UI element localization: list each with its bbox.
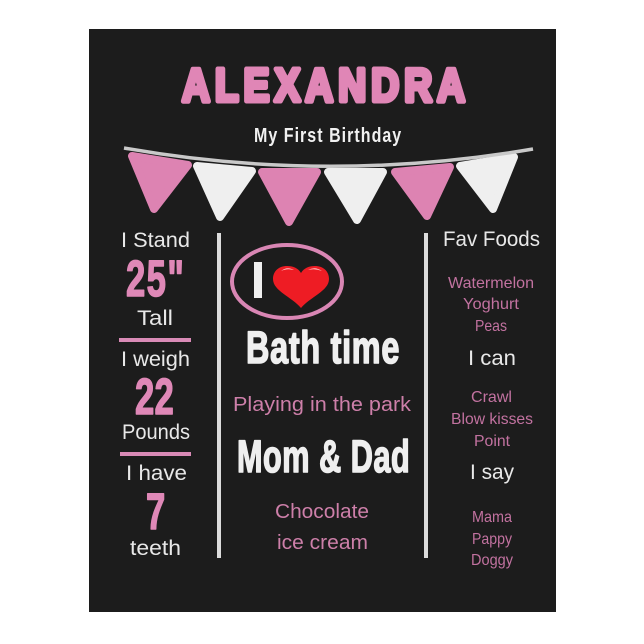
column: centre favourites bbox=[232, 245, 412, 554]
oval badge bbox=[232, 245, 342, 318]
list: words: Doggy bbox=[471, 552, 513, 569]
flag 1 bbox=[132, 156, 188, 209]
divider 1 bbox=[119, 338, 191, 342]
divider 2 bbox=[120, 452, 191, 456]
bunting string bbox=[124, 148, 533, 166]
list: foods: Peas bbox=[475, 318, 507, 335]
panel: black canvas board bbox=[89, 29, 556, 612]
text: Chocolate: Chocolate bbox=[275, 501, 369, 523]
list: skills: Blow kisses bbox=[451, 411, 533, 428]
title: name: ALEXANDRA bbox=[182, 60, 465, 111]
flag 6 bbox=[460, 157, 514, 209]
heading: I say: I say bbox=[470, 461, 514, 484]
text: ice cream: ice cream bbox=[277, 532, 368, 554]
list: words: Mama bbox=[472, 509, 512, 526]
flag 4 bbox=[328, 172, 383, 220]
list: foods: Yoghurt bbox=[463, 296, 520, 313]
text: Tall: Tall bbox=[137, 307, 173, 330]
heading: Fav Foods: Fav Foods bbox=[443, 228, 540, 251]
flag 2 bbox=[197, 166, 252, 217]
text: I have: I have bbox=[126, 462, 187, 485]
text: Pounds: Pounds bbox=[122, 421, 190, 444]
text: Mom and Dad: Mom & Dad bbox=[237, 432, 410, 483]
list: words: Pappy bbox=[472, 531, 512, 548]
list: foods: Watermelon bbox=[448, 275, 534, 292]
text: I Stand: I Stand bbox=[121, 229, 190, 252]
number: weight: 22 bbox=[135, 370, 174, 426]
flag 3 bbox=[262, 172, 317, 222]
list: foods bbox=[448, 275, 534, 335]
flag 5 bbox=[395, 167, 450, 216]
text: I weigh: I weigh bbox=[121, 348, 190, 371]
number: height: 25" bbox=[126, 252, 184, 308]
list: skills bbox=[451, 389, 533, 450]
text: I bbox=[254, 262, 262, 298]
list: skills: Point bbox=[474, 433, 511, 450]
list: words bbox=[471, 509, 513, 569]
subtitle: My First Birthday bbox=[254, 124, 401, 146]
column divider left bbox=[217, 233, 221, 558]
column: left stats bbox=[119, 229, 191, 560]
list: skills: Crawl bbox=[471, 389, 512, 406]
number: teeth: 7 bbox=[146, 485, 165, 541]
text: Bath time: Bath time bbox=[246, 324, 399, 373]
heading: I can: I can bbox=[468, 347, 516, 370]
column divider right bbox=[424, 233, 428, 558]
icon: heart bbox=[273, 266, 329, 308]
text: teeth: teeth bbox=[130, 537, 181, 560]
text: Playing in the park: Playing in the park bbox=[233, 394, 412, 416]
bunting banner bbox=[124, 148, 533, 222]
column: right lists bbox=[443, 228, 540, 569]
